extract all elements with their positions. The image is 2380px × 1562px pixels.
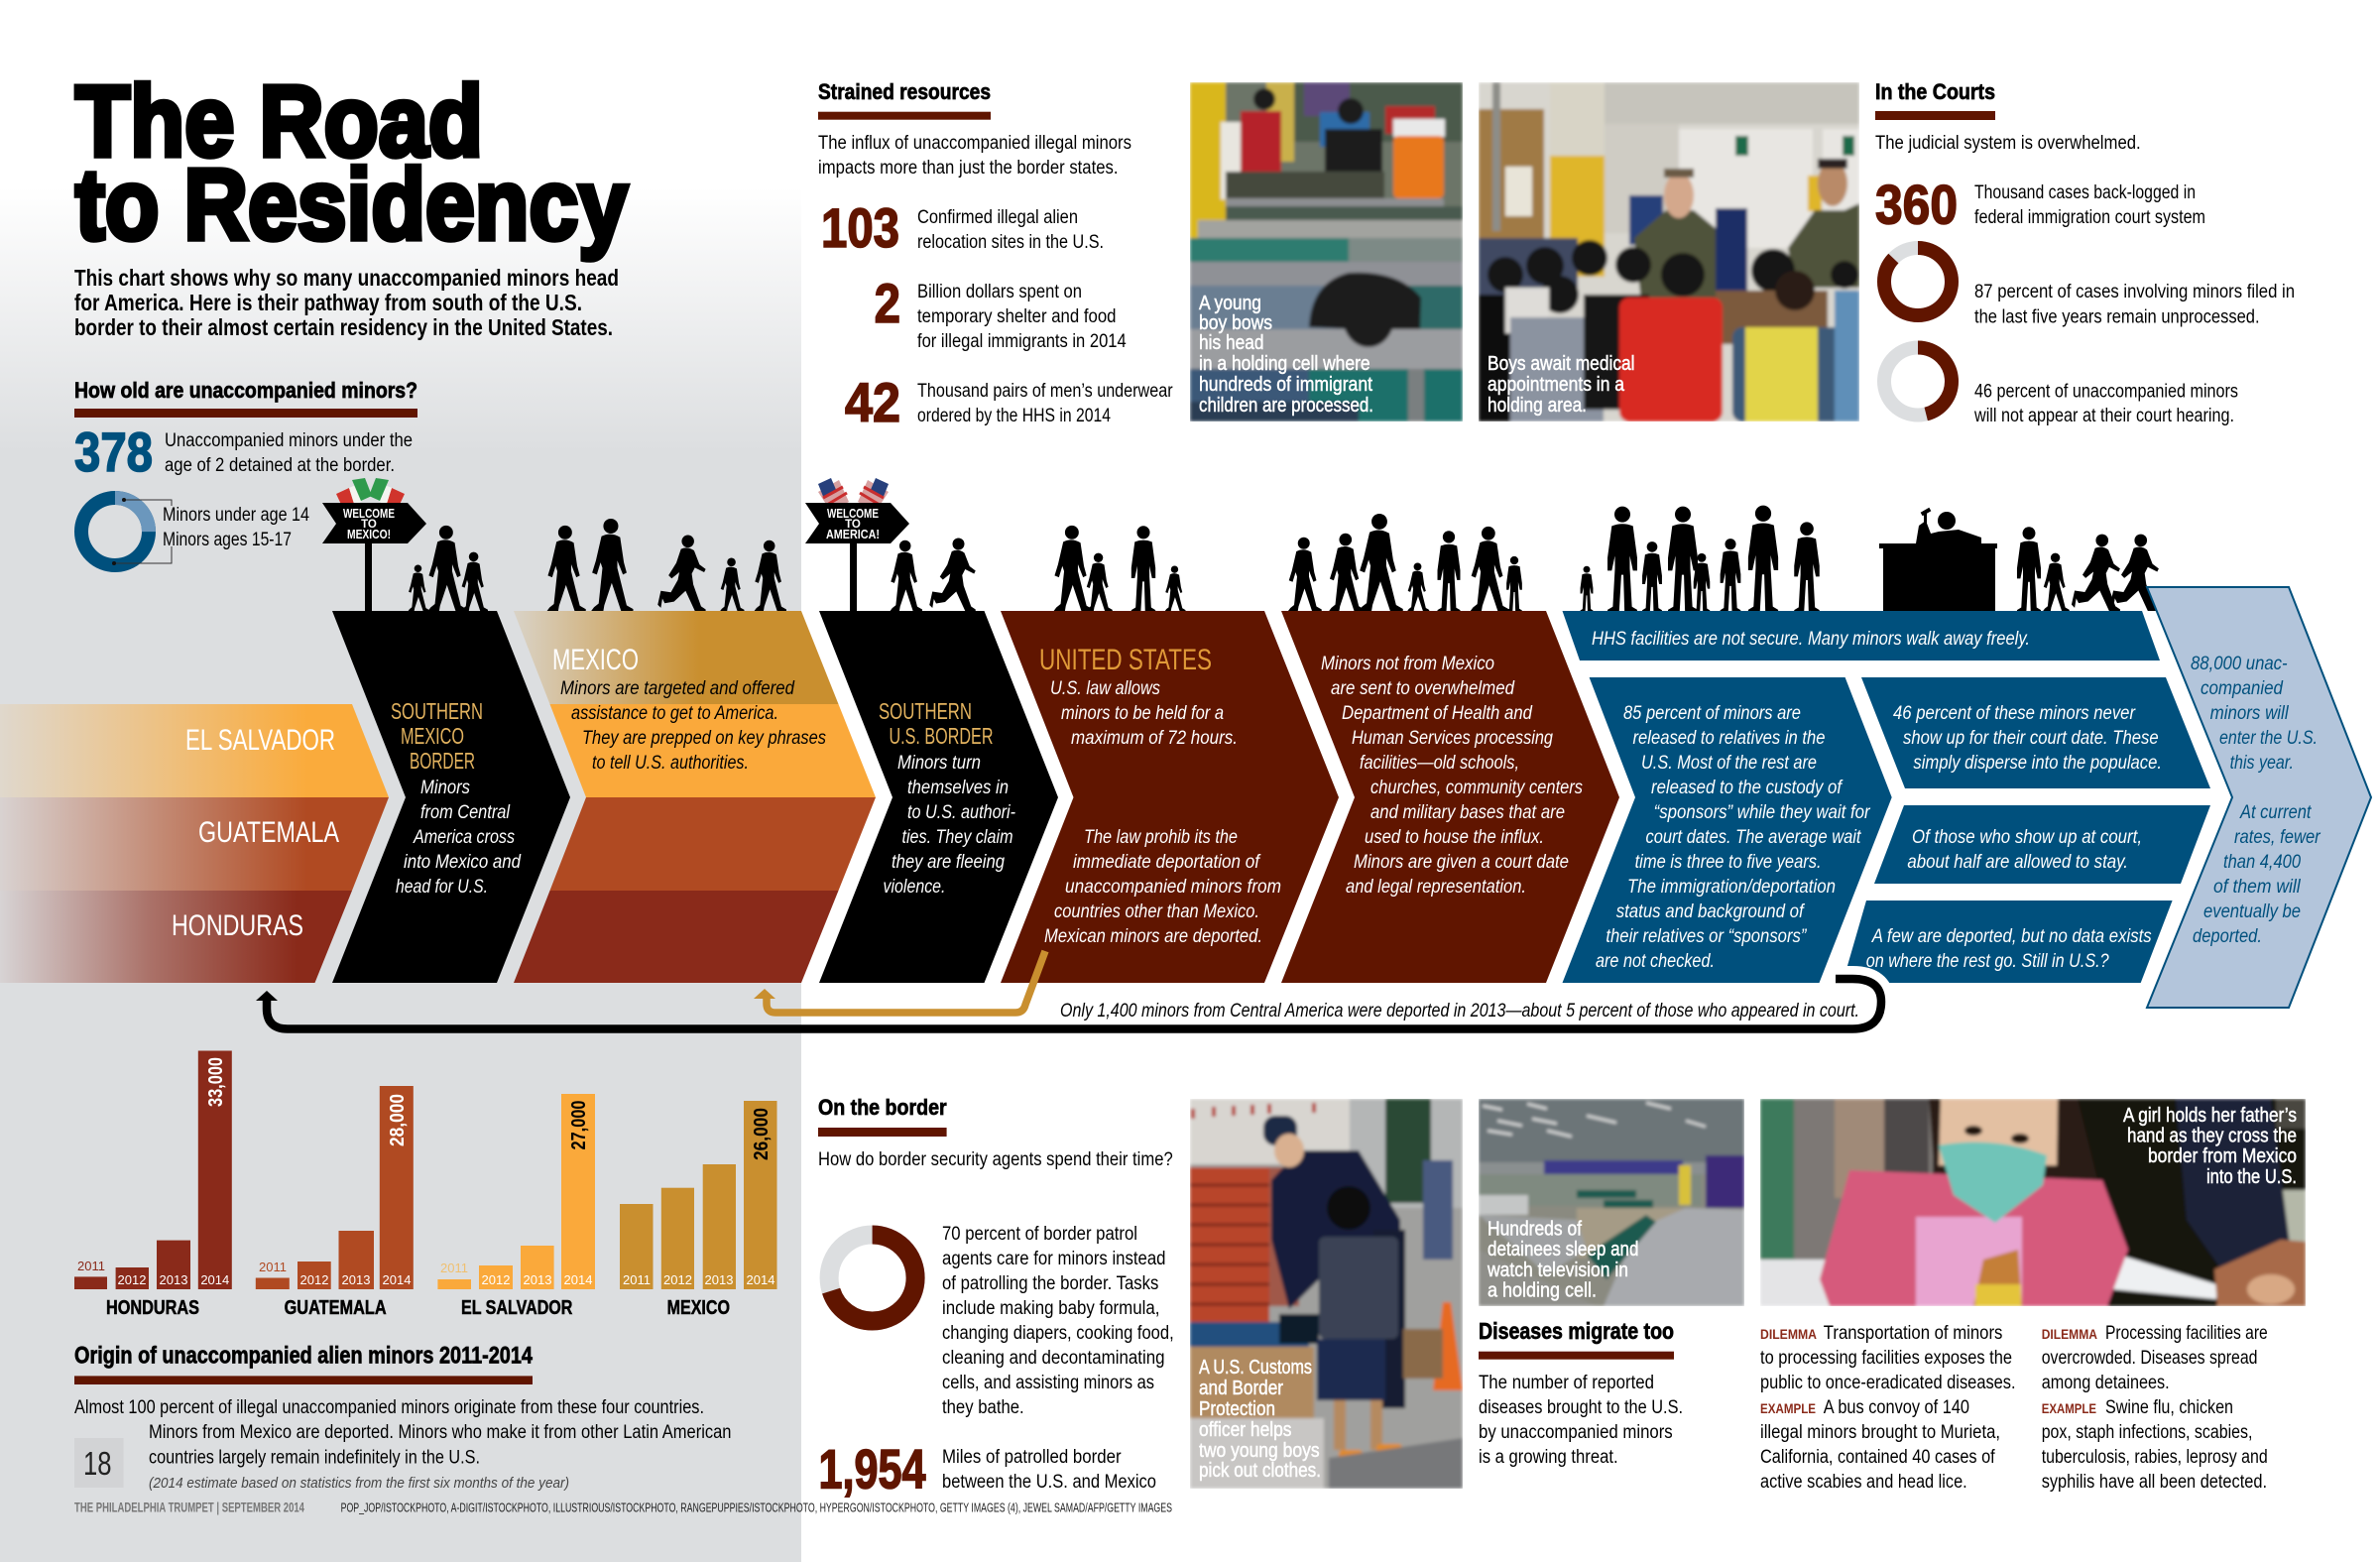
text block: overcrowding dilemma: DILEMMA (2042, 1326, 2097, 1342)
panel: Mexico chevron (514, 611, 876, 983)
caption: holding area. (1488, 395, 1587, 417)
body text: cells, and assisting minors as (942, 1373, 1154, 1393)
heading: strained resources: Strained resources (818, 79, 991, 104)
caption: border from Mexico (2148, 1145, 2297, 1167)
panel: 88,000 outcome arrow: At current (2239, 802, 2312, 823)
panel: southern U.S. border chevron: U.S. BORDER (889, 723, 994, 749)
stat text: 46 percent: 46 percent of unaccompanied minors (1974, 381, 2238, 403)
bars: Mexico: 2011 (623, 1272, 651, 1287)
text block: transportation dilemma: public to once-eradicated diseases. (1760, 1373, 2016, 1393)
stat text: age of 2 detained at the border. (165, 455, 395, 476)
text block: transportation dilemma: EXAMPLE (1760, 1400, 1816, 1416)
country labels: GUATEMALA (285, 1297, 387, 1319)
text block: overcrowding dilemma (2042, 1323, 2268, 1493)
panel: southern U.S. border chevron (819, 611, 1058, 983)
sign: welcome to Mexico: MEXICO! (347, 528, 391, 541)
text block: overcrowding dilemma: among detainees. (2042, 1373, 2170, 1393)
panel: processing facilities chevron: used to house the influx. (1365, 827, 1544, 848)
stat: 2: for illegal immigrants in 2014 (917, 331, 1127, 352)
deportation note: Only 1,400 minors from Central America were deported in 2013—about 5 percent of those who appeared in court. (1060, 1001, 1859, 1021)
panel: HHS facilities banner: HHS facilities are not secure. Many minors walk away freely. (1592, 629, 2030, 650)
caption: officer helps (1199, 1419, 1291, 1441)
sign: welcome to America: TO (845, 519, 861, 531)
stat: 1,954 (819, 1438, 1156, 1501)
caption: A young (1199, 293, 1261, 314)
stat text: 46 percent (1973, 381, 2238, 426)
panel: deported: A few are deported, but no data exists (1871, 926, 2152, 947)
stat: 103: 103 (821, 196, 899, 259)
panel: diseases migrate too (1479, 1318, 1683, 1468)
icon: silhouettes of detained family groups (1288, 506, 1820, 611)
panel: 88,000 outcome arrow: rates, fewer (2234, 827, 2320, 848)
donut legend: Minors under age 14 (163, 505, 309, 526)
panel: deported (1843, 901, 2173, 983)
intro text (74, 265, 619, 340)
caption: a holding cell. (1488, 1280, 1597, 1302)
panel: released to relatives chevron: are not checked. (1596, 951, 1715, 972)
title (75, 66, 628, 261)
donut: age split (81, 498, 172, 565)
panel: United States chevron: The law prohib its the (1084, 827, 1238, 848)
bars: Guatemala: 2011 (259, 1260, 287, 1274)
text block: overcrowding dilemma: tuberculosis, rabies, leprosy and (2042, 1447, 2268, 1468)
panel: 88,000 outcome arrow: deported. (2193, 926, 2262, 947)
heading: diseases: Diseases migrate too (1479, 1318, 1674, 1344)
panel: southern Mexico border chevron (332, 611, 570, 983)
stat: 360 (1875, 174, 2205, 236)
donut: 87 percent (1884, 248, 1952, 315)
bars: Guatemala: 28,000 (387, 1094, 409, 1146)
panel: how old are minors (74, 378, 417, 565)
body text (1479, 1373, 1683, 1468)
footer credit: THE PHILADELPHIA TRUMPET | SEPTEMBER 2014 (74, 1500, 304, 1515)
panel: southern U.S. border chevron: themselves in (907, 778, 1009, 798)
panel: southern Mexico border chevron: Minors (420, 778, 470, 798)
panel: on the border (818, 1095, 1174, 1501)
panel: 88,000 outcome arrow: companied (2201, 678, 2284, 699)
panel: southern Mexico border chevron: America cross (413, 827, 515, 848)
panel: released to relatives chevron: court dates. The average wait (1646, 827, 1861, 848)
caption: in a holding cell where (1199, 353, 1370, 375)
panel: released to relatives chevron: released to the custody of (1651, 778, 1844, 798)
donut: 46 percent (1884, 347, 1952, 415)
caption: and Border (1199, 1378, 1283, 1399)
caption: into the U.S. (2206, 1166, 2297, 1188)
stat: 1,954: Miles of patrolled border (942, 1447, 1122, 1468)
icon: silhouettes crossing into Mexico (409, 519, 786, 611)
panel: 88,000 outcome arrow (2147, 587, 2371, 1008)
page number 18: 18 (83, 1445, 111, 1482)
stat: 360: federal immigration court system (1974, 207, 2205, 228)
country labels (106, 1297, 730, 1319)
stat: 42: Thousand pairs of men’s underwear (917, 381, 1173, 402)
caption: Boys await medical (1488, 353, 1634, 375)
text block: transportation dilemma (1760, 1323, 2016, 1493)
stat: 1,954: 1,954 (819, 1438, 926, 1501)
bars: Honduras (74, 1051, 232, 1289)
intro text: border to their almost certain residency in the United States. (74, 314, 613, 340)
panel: southern Mexico border chevron: SOUTHERN (391, 698, 483, 724)
caption: Protection (1199, 1398, 1275, 1420)
panel: Mexico chevron: They are prepped on key phrases (582, 728, 826, 749)
caption: Hundreds of (1488, 1219, 1582, 1241)
panel: southern Mexico border chevron: head for U.S. (396, 877, 488, 898)
sign: welcome to America: WELCOME (827, 507, 879, 521)
text block: transportation dilemma: illegal minors brought to Murieta, (1760, 1422, 2000, 1443)
bars: El Salvador: 2013 (524, 1272, 551, 1287)
stat: 2: 2 (875, 272, 900, 334)
panel: United States chevron: unaccompanied minors from (1065, 877, 1281, 898)
stat: 1,954: between the U.S. and Mexico (942, 1472, 1156, 1493)
bars: Guatemala: 2012 (300, 1272, 328, 1287)
caption: pick out clothes. (1199, 1460, 1321, 1482)
bars: Honduras: 2011 (77, 1259, 105, 1273)
panel: United States chevron: U.S. law allows (1050, 678, 1160, 699)
panel: processing facilities chevron: Department of Health and (1342, 703, 1533, 724)
photo: boys await medical appointments (1479, 82, 1859, 421)
panel: never show up: 46 percent of these minors never (1893, 703, 2136, 724)
body text: countries largely remain indefinitely in the U.S. (149, 1448, 480, 1468)
panel: released to relatives chevron: 85 percent of minors are (1623, 703, 1801, 724)
photo: boy in holding cell (1190, 82, 1463, 421)
caption (1199, 1357, 1321, 1482)
stat text: Unaccompanied minors under the (165, 430, 413, 451)
panel: southern U.S. border chevron: SOUTHERN (879, 698, 972, 724)
heading: in the courts: In the Courts (1875, 79, 1995, 104)
title: to Residency (75, 150, 628, 261)
text block: overcrowding dilemma: Processing facilities are (2105, 1323, 2268, 1344)
panel: processing facilities chevron: Human Services processing (1352, 728, 1553, 749)
stat: 378: 378 (74, 421, 153, 483)
panel: southern U.S. border chevron: violence. (883, 877, 946, 898)
intro text: This chart shows why so many unaccompanied minors head (74, 265, 619, 291)
panel: Mexico chevron: Minors are targeted and offered (560, 678, 795, 699)
panel: United States chevron: maximum of 72 hours. (1071, 728, 1238, 749)
photo: detainees in holding cell (1479, 1099, 1744, 1306)
body text: is a growing threat. (1479, 1447, 1618, 1468)
panel: United States chevron (1001, 611, 1339, 983)
body text (74, 1397, 732, 1492)
stat: 42 (845, 371, 1173, 433)
panel: southern Mexico border chevron: from Central (420, 802, 511, 823)
body text: by unaccompanied minors (1479, 1422, 1673, 1443)
panel: 88,000 outcome arrow: this year. (2230, 753, 2294, 774)
donut: 70 percent (829, 1235, 915, 1321)
caption: his head (1199, 332, 1263, 354)
stat text: 46 percent: will not appear at their court hearing. (1973, 406, 2234, 426)
bars: Guatemala: 2013 (342, 1272, 370, 1287)
panel: deported: on where the rest go. Still in U.S.? (1866, 951, 2109, 972)
caption: boy bows (1199, 312, 1272, 334)
bars: El Salvador: 27,000 (568, 1101, 590, 1150)
panel: released to relatives chevron: their relatives or “sponsors” (1606, 926, 1808, 947)
stat: 103 (821, 196, 1104, 259)
body text: they bathe. (942, 1397, 1024, 1418)
panel: United States chevron: immediate deportation of (1073, 852, 1261, 873)
panel: Mexico chevron: assistance to get to America. (571, 703, 778, 724)
text block: transportation dilemma: DILEMMA (1760, 1326, 1817, 1342)
panel: in the courts (1875, 79, 2295, 426)
sign: welcome to America (805, 478, 909, 611)
stat text: 87 percent: 87 percent of cases involving minors filed in (1974, 282, 2295, 302)
body text: agents care for minors instead (942, 1249, 1166, 1269)
panel: allowed to stay (1874, 805, 2210, 884)
panel: processing facilities chevron: churches, community centers (1370, 778, 1583, 798)
intro text (818, 133, 1131, 179)
panel: released to relatives chevron: U.S. Most of the rest are (1641, 753, 1817, 774)
stat: 360: Thousand cases back-logged in (1974, 182, 2196, 203)
sign: welcome to Mexico: TO (361, 519, 377, 531)
bar chart: origin of minors (74, 1051, 777, 1319)
panel: processing facilities chevron (1281, 611, 1619, 983)
photo: customs officer and boys (1190, 1099, 1463, 1489)
icon: judge at bench (1879, 508, 1997, 611)
page number 18 (74, 1438, 123, 1488)
caption (1199, 293, 1373, 417)
sign: welcome to Mexico: WELCOME (343, 507, 395, 521)
panel: southern Mexico border chevron: into Mexico and (404, 852, 522, 873)
stat: 360: 360 (1875, 174, 1958, 236)
stat: 103: relocation sites in the U.S. (917, 232, 1104, 253)
caption: detainees sleep and (1488, 1239, 1638, 1261)
panel: processing facilities chevron: Minors are given a court date (1354, 852, 1569, 873)
stat: 2 (875, 272, 1127, 352)
panel: released to relatives chevron: The immigration/deportation (1627, 877, 1836, 898)
panel: HHS facilities banner (1563, 611, 2160, 661)
panel: Mexico chevron: to tell U.S. authorities. (592, 753, 749, 774)
panel: 88,000 outcome arrow: enter the U.S. (2219, 728, 2318, 749)
stat: 42: 42 (845, 371, 900, 433)
intro text: impacts more than just the border states. (818, 158, 1119, 179)
sign: welcome to Mexico (322, 478, 426, 611)
panel: 88,000 outcome arrow: eventually be (2203, 901, 2301, 922)
body text: Almost 100 percent of illegal unaccompanied minors originate from these four countries. (74, 1397, 704, 1418)
text block: overcrowding dilemma: EXAMPLE (2042, 1400, 2096, 1416)
panel: never show up: show up for their court date. These (1903, 728, 2159, 749)
country labels: HONDURAS (106, 1297, 199, 1319)
body text: Minors from Mexico are deported. Minors who make it from other Latin American (149, 1422, 732, 1443)
panel: southern U.S. border chevron: to U.S. authori- (907, 802, 1015, 823)
intro text: The judicial system is overwhelmed. (1875, 133, 2141, 154)
bars: El Salvador: 2014 (564, 1272, 592, 1287)
bars: Honduras: 33,000 (205, 1057, 227, 1107)
panel: never show up: simply disperse into the populace. (1913, 753, 2162, 774)
bars: Mexico (620, 1101, 777, 1289)
heading: on the border: On the border (818, 1095, 947, 1120)
caption (1488, 353, 1634, 417)
bars: Honduras: 2014 (200, 1272, 229, 1287)
caption: appointments in a (1488, 374, 1625, 396)
panel: United States chevron: Mexican minors are deported. (1044, 926, 1262, 947)
text block: transportation dilemma: California, contained 40 cases of (1760, 1447, 1995, 1468)
text block: overcrowding dilemma: overcrowded. Diseases spread (2042, 1348, 2257, 1369)
bars: Honduras: 2012 (118, 1272, 146, 1287)
sign: welcome to America: AMERICA! (826, 528, 880, 541)
stat: 2: temporary shelter and food (917, 306, 1117, 327)
panel: Mexico chevron: MEXICO (552, 644, 639, 676)
panel: country bands: GUATEMALA (198, 816, 339, 849)
donut legend: Minors ages 15-17 (163, 530, 292, 550)
country labels: EL SALVADOR (461, 1297, 573, 1319)
caption: hundreds of immigrant (1199, 374, 1372, 396)
panel: never show up (1861, 677, 2210, 788)
panel: southern U.S. border chevron: Minors turn (897, 753, 981, 774)
stat: 103: Confirmed illegal alien (917, 207, 1078, 228)
bars: El Salvador (437, 1094, 595, 1289)
caption (1487, 1219, 1638, 1302)
photo credits: POP_JOP/ISTOCKPHOTO, A-DIGIT/ISTOCKPHOTO, ILLUSTRIOUS/ISTOCKPHOTO, RANGEPUPPIES/ISTOCKPHOTO, HYPERGON/ISTOCKPHOTO, GETTY IMAGES (4), JEWEL SAMAD/AFP/GETTY IMAGES (341, 1501, 1172, 1515)
panel: country bands: HONDURAS (172, 909, 303, 942)
body text: The number of reported (1479, 1373, 1654, 1393)
bars: Mexico: 2012 (663, 1272, 692, 1287)
panel: processing facilities chevron: Minors not from Mexico (1321, 654, 1494, 674)
panel: released to relatives chevron: “sponsors” while they wait for (1654, 802, 1870, 823)
bars: Honduras: 2013 (160, 1272, 187, 1287)
heading: origin: Origin of unaccompanied alien minors 2011-2014 (74, 1343, 534, 1369)
title: The Road (75, 66, 483, 178)
panel: southern U.S. border chevron: ties. They claim (902, 827, 1013, 848)
body text: diseases brought to the U.S. (1479, 1397, 1683, 1418)
panel: allowed to stay: Of those who show up at court, (1912, 827, 2142, 848)
panel: southern Mexico border chevron: BORDER (410, 748, 475, 774)
panel: southern Mexico border chevron: MEXICO (401, 723, 464, 749)
panel: 88,000 outcome arrow: than 4,400 (2223, 852, 2301, 873)
stat text (165, 430, 413, 476)
icon: silhouettes running away from court (2017, 527, 2159, 611)
stat text: 87 percent: the last five years remain unprocessed. (1974, 307, 2260, 327)
panel: processing facilities chevron: are sent to overwhelmed (1331, 678, 1515, 699)
panel: country bands (0, 704, 389, 983)
intro text: The influx of unaccompanied illegal minors (818, 133, 1131, 154)
caption: A girl holds her father’s (2123, 1105, 2297, 1127)
panel: southern U.S. border chevron: they are fleeing (892, 852, 1005, 873)
panel: released to relatives chevron (1563, 677, 1892, 983)
panel: released to relatives chevron: released to relatives in the (1632, 728, 1825, 749)
stat text: 87 percent (1974, 282, 2295, 327)
arrow: Mexican minors deported (754, 951, 1045, 1013)
stat: 2: Billion dollars spent on (917, 282, 1082, 302)
panel: United States chevron: minors to be held for a (1061, 703, 1224, 724)
body text: (2014 estimate based on statistics from the first six months of the year) (149, 1475, 569, 1492)
arrow: deported back to Central America (256, 979, 1881, 1029)
panel: processing facilities chevron: facilities—old schools, (1360, 753, 1519, 774)
body text: changing diapers, cooking food, (942, 1323, 1174, 1344)
icon: silhouettes crossing into the U.S. (891, 526, 1186, 611)
question: How do border security agents spend their time? (818, 1149, 1173, 1170)
stat: 42: ordered by the HHS in 2014 (917, 406, 1111, 426)
bars: Mexico: 2013 (705, 1272, 733, 1287)
bars: Mexico: 26,000 (751, 1108, 773, 1160)
body text: cleaning and decontaminating (942, 1348, 1164, 1369)
text block: overcrowding dilemma: pox, staph infections, scabies, (2042, 1422, 2252, 1443)
body text: of patrolling the border. Tasks (942, 1273, 1158, 1294)
panel: strained resources (818, 79, 1173, 433)
panel: origin text (74, 1343, 732, 1515)
body text: 70 percent of border patrol (942, 1224, 1137, 1245)
panel: 88,000 outcome arrow: minors will (2210, 703, 2289, 724)
body text: include making baby formula, (942, 1298, 1159, 1319)
panel: allowed to stay: about half are allowed to stay. (1907, 852, 2128, 873)
heading: how old: How old are unaccompanied minors? (74, 378, 417, 403)
panel: 88,000 outcome arrow: 88,000 unac- (2191, 654, 2288, 674)
bars: Guatemala (256, 1086, 414, 1289)
bars: Guatemala: 2014 (383, 1272, 411, 1287)
bars: El Salvador: 2011 (440, 1261, 468, 1275)
caption: two young boys (1199, 1440, 1320, 1462)
text block: transportation dilemma: Transportation of minors (1824, 1323, 2002, 1344)
caption: watch television in (1487, 1260, 1628, 1281)
caption: hand as they cross the (2127, 1126, 2297, 1147)
panel: country bands: EL SALVADOR (185, 724, 335, 757)
panel: released to relatives chevron: time is three to five years. (1635, 852, 1822, 873)
text block: transportation dilemma: active scabies and head lice. (1760, 1472, 1967, 1493)
text block: transportation dilemma: to processing facilities exposes the (1760, 1348, 2012, 1369)
country labels: MEXICO (667, 1297, 730, 1319)
panel: United States chevron: UNITED STATES (1039, 644, 1212, 676)
caption: children are processed. (1199, 395, 1373, 417)
panel: processing facilities chevron: and military bases that are (1370, 802, 1565, 823)
panel: processing facilities chevron: and legal representation. (1346, 877, 1526, 898)
text block: overcrowding dilemma: syphilis have all been detected. (2042, 1472, 2267, 1493)
bars: Mexico: 2014 (747, 1272, 774, 1287)
intro text: for America. Here is their pathway from south of the U.S. (74, 290, 582, 315)
panel: United States chevron: countries other than Mexico. (1054, 901, 1259, 922)
panel: 88,000 outcome arrow: of them will (2213, 877, 2301, 898)
text block: overcrowding dilemma: Swine flu, chicken (2105, 1397, 2233, 1418)
donut legend (163, 505, 309, 550)
text block: transportation dilemma: A bus convoy of 140 (1824, 1397, 1969, 1418)
caption: A U.S. Customs (1199, 1357, 1312, 1379)
panel: released to relatives chevron: status and background of (1616, 901, 1805, 922)
panel: grey left background (0, 0, 801, 1562)
caption (2123, 1105, 2297, 1188)
bars: El Salvador: 2012 (482, 1272, 510, 1287)
body text (942, 1224, 1174, 1418)
photo: girl in mask (1760, 1099, 2306, 1306)
